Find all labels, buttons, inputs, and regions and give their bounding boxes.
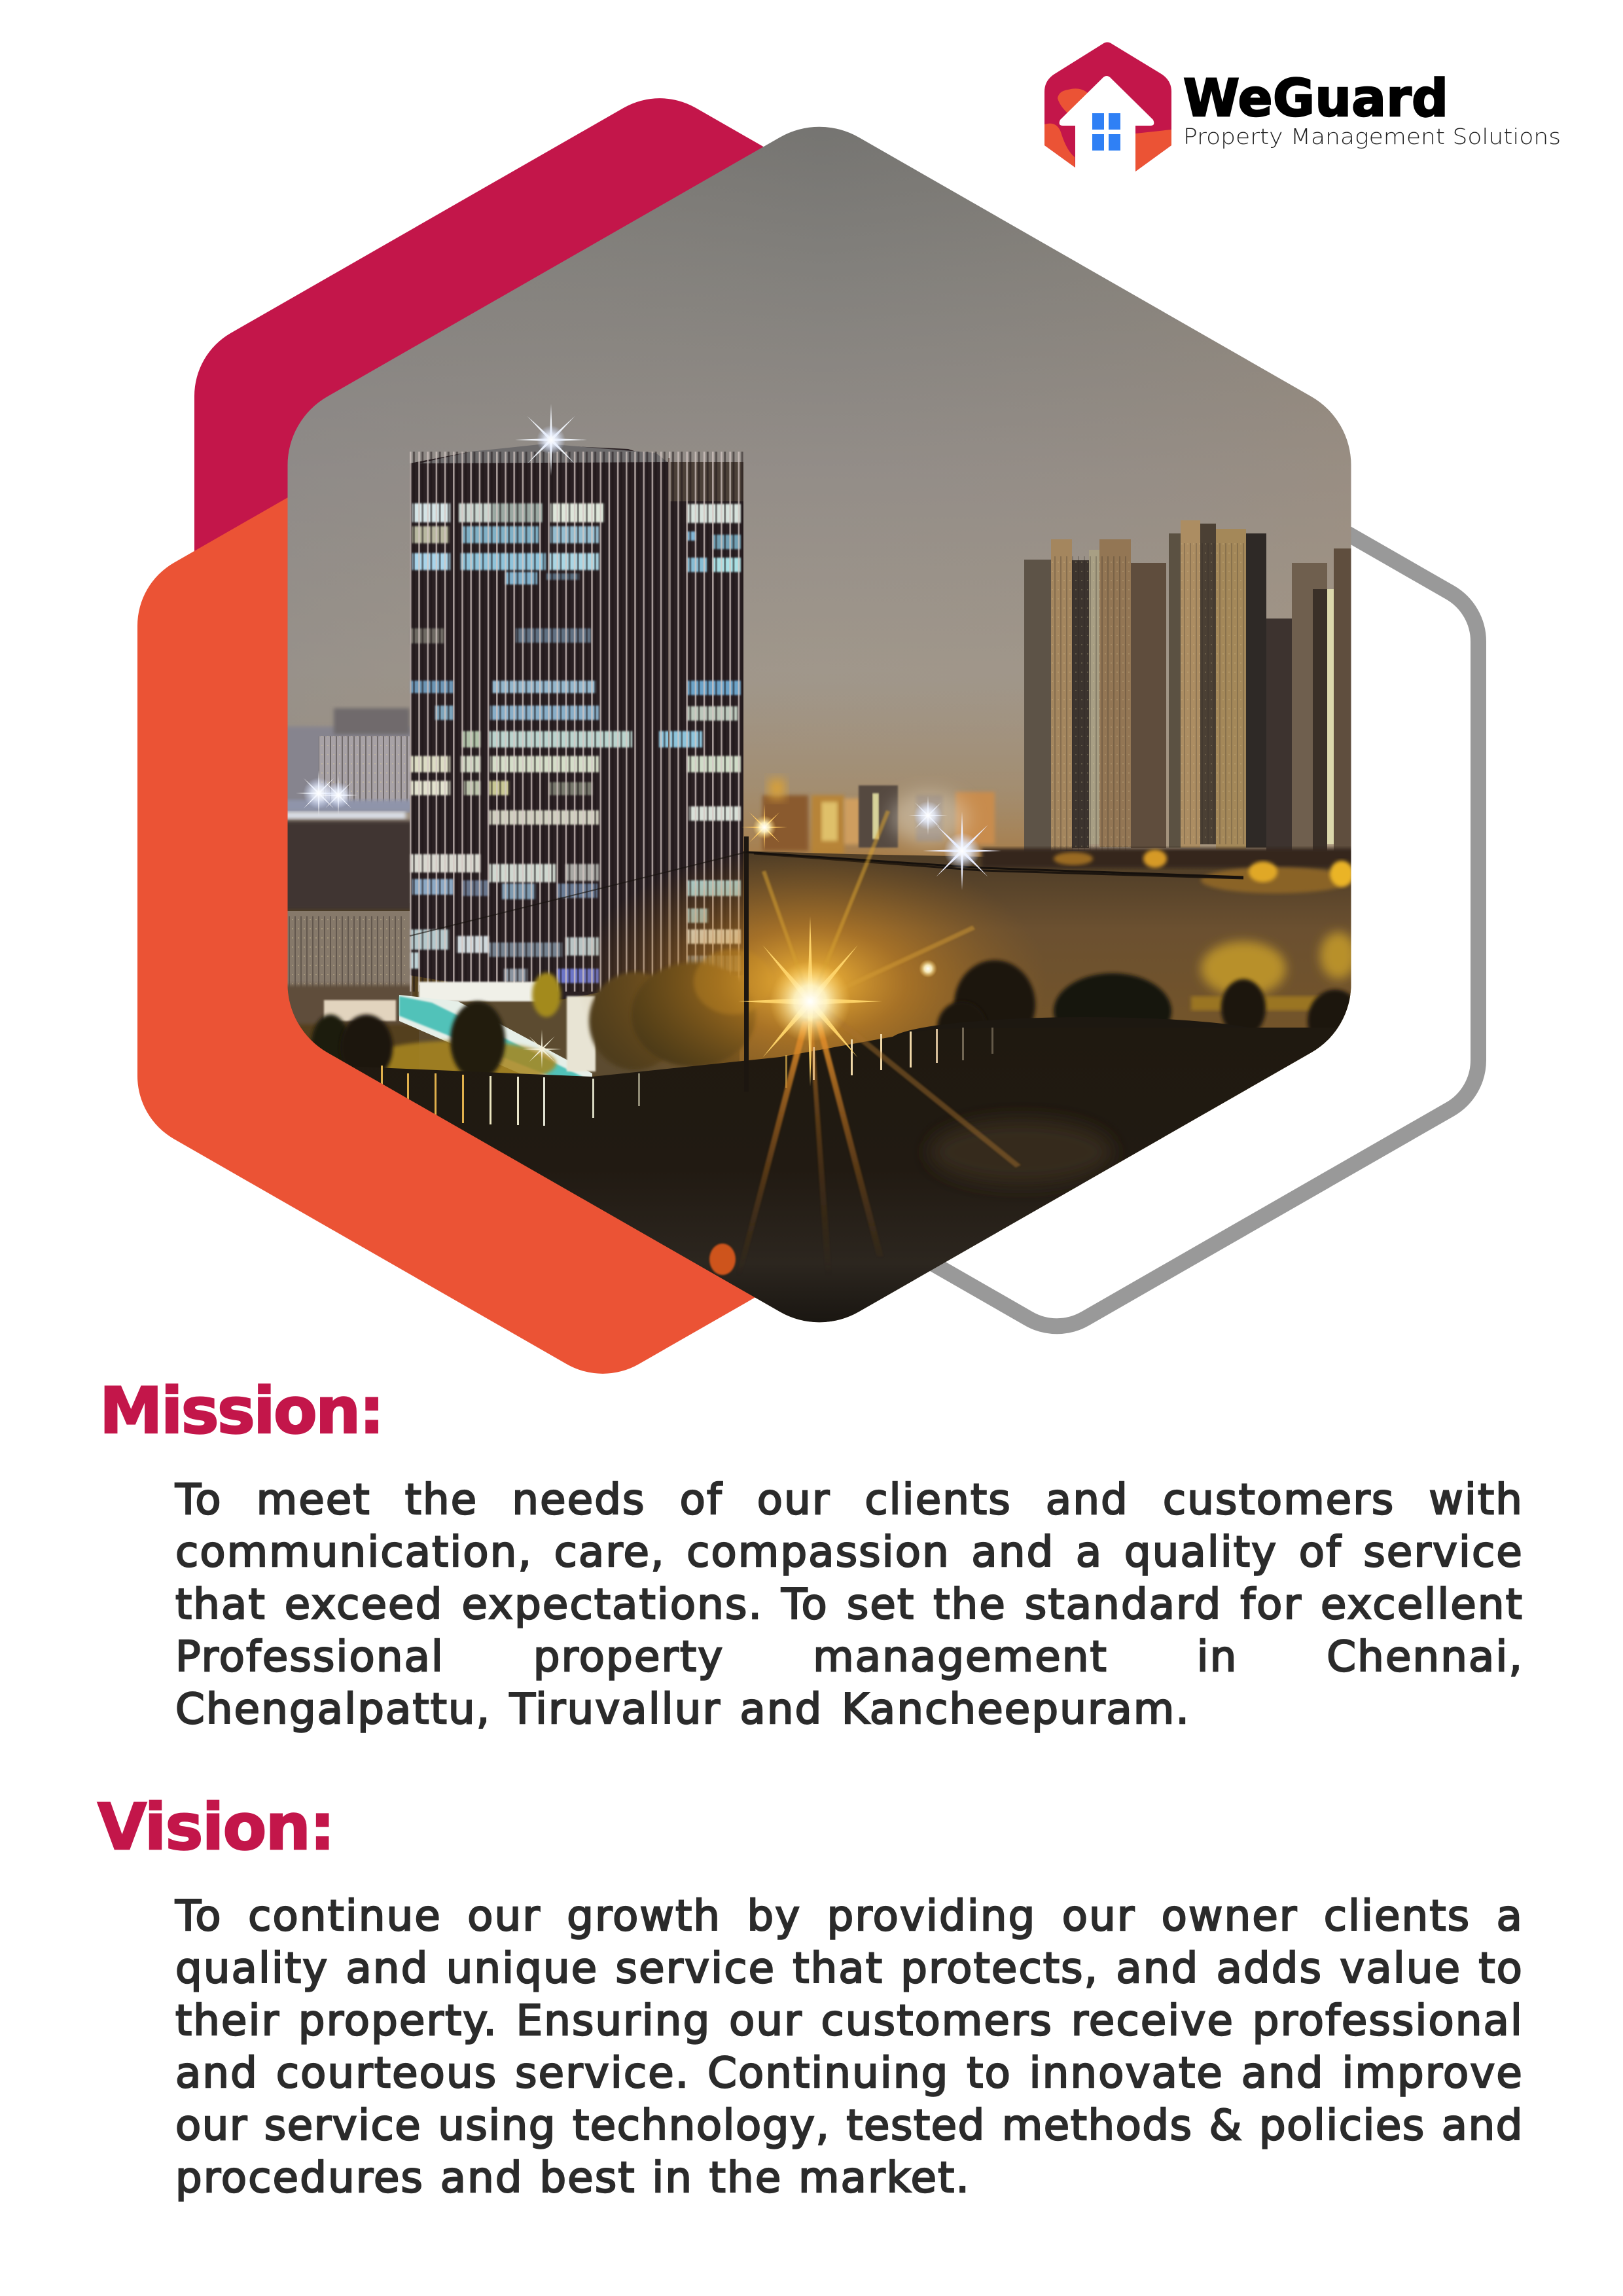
tower A — [1024, 539, 1166, 855]
lit windows — [410, 503, 741, 983]
fence posts — [381, 1028, 993, 1126]
trees around tower base — [311, 949, 772, 1086]
tower lobby and base — [323, 980, 686, 1077]
distant building left — [281, 708, 412, 1024]
hexagon: crimson back shape — [194, 98, 1125, 1144]
sky — [288, 127, 1351, 851]
hexagon: grey outline — [635, 376, 1478, 1326]
large star light — [734, 810, 1021, 1283]
text: and courteous service. Continuing to innovate and improve — [175, 2049, 1524, 2098]
tower B — [1169, 520, 1266, 850]
text: their property. Ensuring our customers receive professional — [175, 1997, 1524, 2045]
ground mound — [929, 1119, 1113, 1185]
tower C D E — [1266, 548, 1352, 854]
text: procedures and best in the market. — [175, 2154, 971, 2202]
logo: wordmark: WeGuard — [1183, 69, 1448, 128]
foreground ground — [281, 1028, 1355, 1342]
trees on right — [890, 932, 1363, 1064]
mid ground — [740, 851, 1355, 1113]
lens flare dot — [709, 1244, 736, 1275]
logo: house mark — [1041, 42, 1171, 177]
text: communication, care, compassion and a quality of service — [175, 1528, 1524, 1577]
text block: mission statement — [174, 1476, 1524, 1734]
logo: tagline: Property Management Solutions — [1183, 124, 1561, 149]
text: our service using technology, tested methods & policies and — [175, 2102, 1524, 2150]
text: quality and unique service that protects, and adds value to — [175, 1945, 1524, 1993]
text: To continue our growth by providing our owner clients a — [175, 1892, 1524, 1941]
hexagon: orange back shape — [137, 328, 1068, 1374]
hexagon photo: night city skyline — [281, 111, 1363, 1348]
tower group right — [1024, 520, 1352, 855]
big light glow — [576, 844, 1047, 1119]
photo base tone — [281, 903, 1361, 1348]
far hedge with lights — [754, 848, 1355, 893]
text block: vision statement — [174, 1892, 1524, 2202]
facade fins — [410, 452, 743, 992]
text: Professional property management in Chennai, — [175, 1633, 1524, 1681]
small star lights — [296, 404, 1001, 1069]
main office tower — [410, 444, 743, 1000]
text: Chengalpattu, Tiruvallur and Kancheepuram. — [175, 1685, 1190, 1734]
heading: Mission: Mission: — [99, 1374, 383, 1448]
utility pole and wires — [410, 836, 1243, 1092]
text: To meet the needs of our clients and customers with — [175, 1476, 1524, 1524]
distant city lights — [743, 741, 1024, 857]
heading: Vision: Vision: — [98, 1790, 334, 1864]
text: that exceed expectations. To set the standard for excellent — [175, 1581, 1524, 1629]
